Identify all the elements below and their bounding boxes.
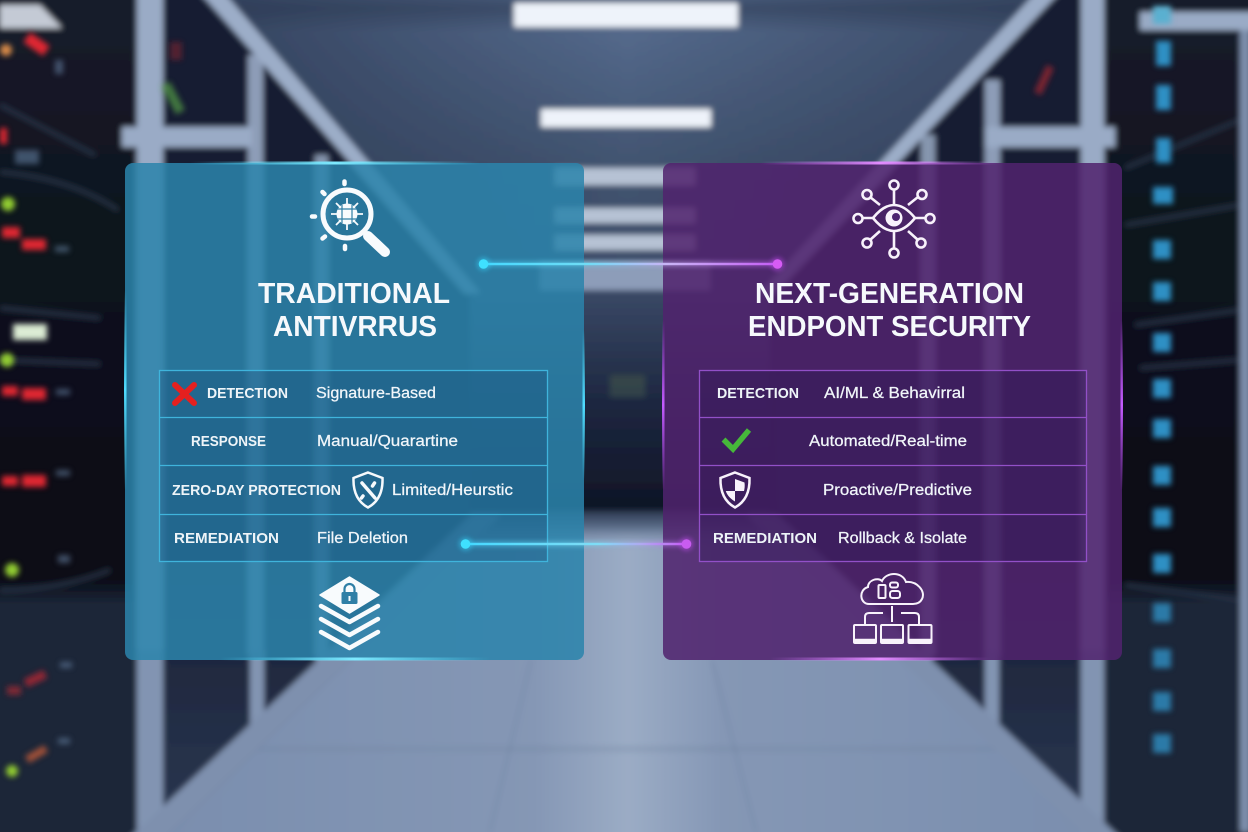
panel edge glows [662, 162, 1123, 660]
connector: bottom link between panels [458, 537, 694, 551]
heading [258, 278, 450, 343]
icon: red cross [175, 385, 194, 403]
row: remediation: REMEDIATION [713, 530, 817, 547]
panel edge glows [124, 162, 585, 660]
comparison table [700, 370, 1086, 562]
heading: NEXT-GENERATION [755, 278, 1024, 310]
row: response value: Automated/Real-time [809, 433, 967, 450]
row: detection: AI/ML & Behavirral [824, 385, 965, 402]
row: zero-day value: Proactive/Predictive [823, 482, 972, 499]
icon: magnifying glass with virus [312, 182, 385, 252]
heading: ENDPONT SECURITY [748, 311, 1031, 343]
panel: traditional antivirus [124, 162, 585, 660]
comparison table [160, 370, 548, 562]
panel background [125, 163, 584, 660]
ceiling [195, 0, 1060, 293]
back wall [470, 290, 770, 516]
row: zero-day protection [172, 482, 513, 499]
panel: next-generation endpoint security [662, 162, 1123, 660]
row: zero-day protection: Limited/Heurstic [392, 482, 513, 499]
frame posts [122, 0, 1248, 655]
side rack bays [135, 0, 470, 832]
row: remediation: File Deletion [317, 530, 408, 547]
icon: quartered shield [720, 472, 750, 508]
heading: TRADITIONAL [258, 278, 450, 310]
row: remediation [713, 530, 967, 547]
row: detection [717, 385, 965, 402]
row: remediation: Rollback & Isolate [838, 530, 967, 547]
row: detection: DETECTION [717, 385, 799, 402]
row: zero-day protection: ZERO-DAY PROTECTION [172, 482, 341, 499]
heading [748, 278, 1031, 343]
icon: eye network [854, 180, 934, 258]
row: detection: DETECTION [207, 385, 288, 402]
icon: cloud network [854, 574, 932, 643]
row: detection [207, 385, 436, 402]
floor [161, 515, 1095, 832]
icon: locked layers [320, 577, 379, 648]
row: response [191, 433, 458, 450]
row: remediation: REMEDIATION [174, 530, 279, 547]
heading: ANTIVRRUS [273, 311, 437, 343]
row: response: Manual/Quarartine [317, 433, 458, 450]
connector: top link between panels [476, 257, 784, 271]
icon: shield with cross [353, 472, 383, 508]
row: remediation [174, 530, 408, 547]
ceiling lights [514, 3, 738, 127]
rack shelf lines [0, 105, 1240, 600]
panel background [663, 163, 1122, 660]
row: detection: Signature-Based [316, 385, 436, 402]
icon: green check [724, 430, 749, 449]
row: response: RESPONSE [191, 433, 266, 450]
